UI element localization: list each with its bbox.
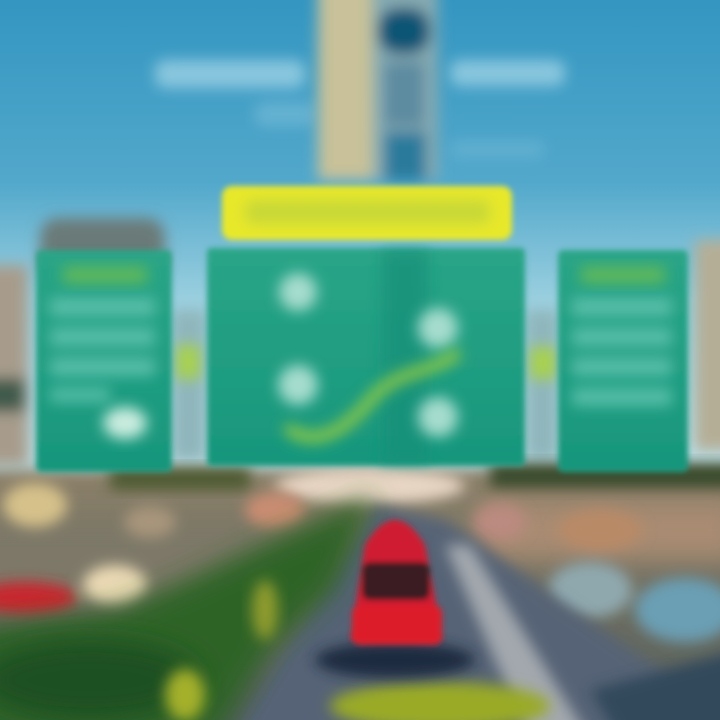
growth curve xyxy=(290,355,455,437)
horizon glow xyxy=(275,468,465,504)
left buildings and cars xyxy=(0,500,720,600)
yellow banner xyxy=(222,186,512,240)
center icons xyxy=(278,273,458,437)
treeline xyxy=(490,464,720,490)
green foliage xyxy=(0,495,375,720)
central tower xyxy=(318,0,438,180)
right panel heading xyxy=(580,266,666,284)
connector accents xyxy=(176,345,556,379)
left panel icon xyxy=(103,407,147,439)
left panel heading xyxy=(62,266,148,284)
street scene xyxy=(0,464,720,720)
road shadow xyxy=(315,642,475,678)
panel: center xyxy=(207,248,525,466)
red bus xyxy=(350,520,443,645)
panel: right xyxy=(558,250,688,472)
sky background xyxy=(0,0,720,500)
background buildings xyxy=(0,218,720,465)
title: blurred heading bars xyxy=(155,60,565,158)
left panel text xyxy=(50,298,155,402)
right cars xyxy=(474,504,720,642)
road xyxy=(230,505,720,720)
panel: left xyxy=(36,250,172,472)
right panel text xyxy=(572,298,672,406)
